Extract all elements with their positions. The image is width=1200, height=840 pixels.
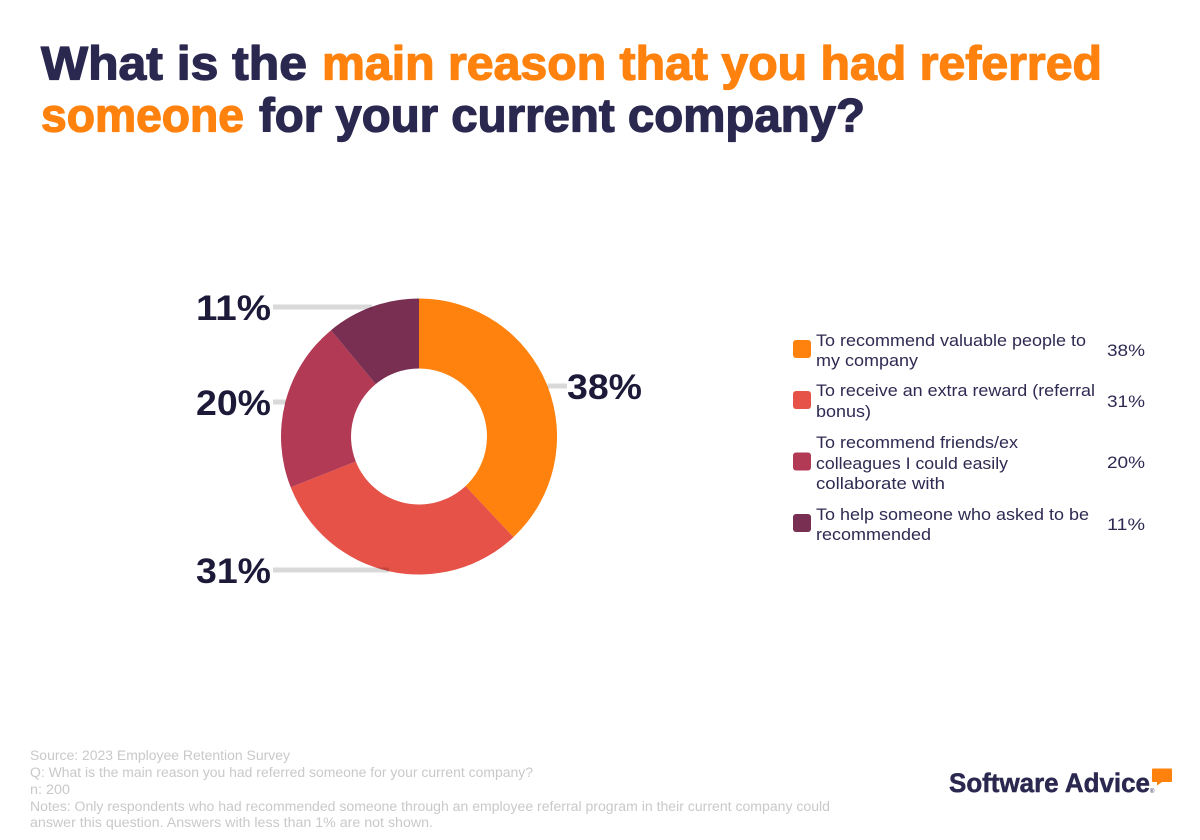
legend item: 20%: 20% [1107, 453, 1145, 472]
source notes: answer this question. Answers with less than 1% are not shown. [30, 815, 433, 830]
legend [793, 331, 1145, 544]
data label: 20%: 20% [196, 384, 271, 423]
donut chart [273, 298, 567, 575]
source notes [30, 748, 830, 830]
slice: 38% [419, 298, 557, 537]
logo: Software Advice: ® [1150, 788, 1155, 795]
legend item: 38%: To recommend valuable people to [816, 331, 1086, 350]
logo: Software Advice: Software Advice [949, 768, 1150, 798]
data label: 38%: 38% [567, 368, 642, 407]
legend item: 20%: To recommend friends/ex [816, 433, 1019, 452]
title: for your current company? [259, 88, 865, 142]
legend item: 11%: To help someone who asked to be [816, 505, 1089, 524]
slice: 20% [281, 330, 376, 487]
legend item: 31%: bonus) [816, 402, 871, 421]
slice: 11% [331, 298, 419, 384]
data label: 11%: 11% [196, 289, 271, 328]
legend item: 11%: 11% [1107, 515, 1145, 534]
legend item: 11% [793, 505, 1145, 544]
source notes: Notes: Only respondents who had recommended someone through an employee referral program in their current company could [30, 799, 830, 814]
legend item: 31%: To receive an extra reward (referral [816, 381, 1095, 400]
title [41, 36, 1102, 142]
data label: 31%: 31% [196, 552, 271, 591]
source notes: Source: 2023 Employee Retention Survey [30, 748, 290, 763]
title: What is the [41, 36, 307, 90]
legend item: 31% [793, 381, 1145, 421]
legend item: 38% [793, 331, 1145, 370]
source notes: n: 200 [30, 782, 70, 797]
title: someone [41, 88, 244, 142]
legend item: 20%: collaborate with [816, 474, 945, 493]
title: main reason that you had referred [322, 36, 1102, 90]
source notes: Q: What is the main reason you had referred someone for your current company? [30, 765, 533, 780]
legend item: 20% [793, 433, 1145, 493]
leader lines [273, 307, 567, 570]
legend item: 20%: colleagues I could easily [816, 454, 1009, 473]
legend item: 38%: 38% [1107, 341, 1145, 360]
legend item: 11%: recommended [816, 525, 931, 544]
legend item: 31%: 31% [1107, 392, 1145, 411]
slice: 31% [291, 462, 514, 575]
legend item: 38%: my company [816, 351, 919, 370]
icon: speech bubble [1152, 768, 1172, 786]
